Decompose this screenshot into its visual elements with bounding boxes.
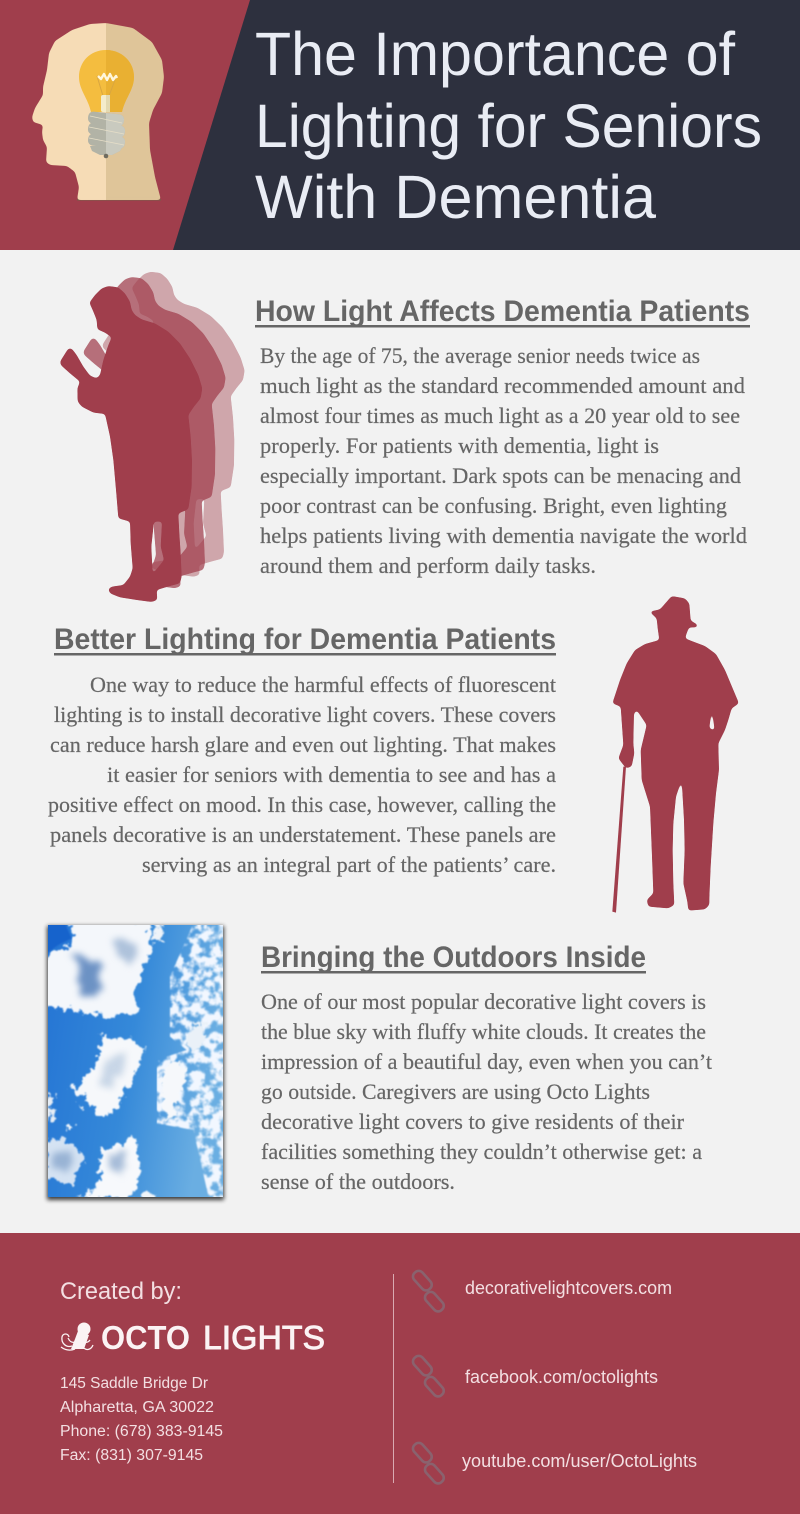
text block: bringing the outdoors: One of our most popular decorative light covers is: [261, 989, 706, 1014]
header banner: [0, 0, 800, 250]
text block: how light affects: around them and perform daily tasks.: [260, 553, 596, 578]
title: With Dementia: [255, 163, 656, 231]
text block: how light affects: [260, 343, 747, 578]
section: how light affects dementia patients: [255, 295, 750, 578]
text block: how light affects: By the age of 75, the average senior needs twice as: [260, 343, 700, 368]
text block: better lighting: it easier for seniors with dementia to see and has a: [107, 762, 556, 787]
text block: bringing the outdoors: [261, 989, 712, 1194]
text block: how light affects: properly. For patients with dementia, light is: [260, 433, 659, 458]
heading: bringing the outdoors: Bringing the Outdoors Inside: [261, 941, 646, 974]
image: blue sky with clouds: [43, 920, 230, 1203]
created by label: Created by:: [60, 1278, 182, 1305]
text block: how light affects: especially important. Dark spots can be menacing and: [260, 463, 741, 488]
text block: better lighting: panels decorative is an understatement. These panels are: [50, 822, 556, 847]
text block: how light affects: much light as the standard recommended amount and: [260, 373, 745, 398]
text block: how light affects: poor contrast can be confusing. Bright, even lighting: [260, 493, 727, 518]
link: youtube: youtube.com/user/OctoLights: [462, 1451, 697, 1471]
text block: how light affects: helps patients living with dementia navigate the world: [260, 523, 747, 548]
address: [60, 1375, 223, 1464]
title: Lighting for Seniors: [255, 92, 762, 160]
illustration: man with hat and cane: [612, 596, 739, 913]
logo: Octo Lights: OCTO: [101, 1319, 190, 1356]
link: facebook: [411, 1354, 658, 1399]
address: Fax: (831) 307-9145: [60, 1447, 203, 1464]
text block: better lighting: [48, 672, 556, 877]
text block: bringing the outdoors: impression of a beautiful day, even when you can’t: [261, 1049, 712, 1074]
illustration: elderly figure with fading echoes: [60, 272, 245, 602]
text block: bringing the outdoors: go outside. Caregivers are using Octo Lights: [261, 1079, 650, 1104]
text block: better lighting: lighting is to install decorative light covers. These covers: [54, 702, 556, 727]
text block: bringing the outdoors: facilities something they couldn’t otherwise get: a: [261, 1139, 702, 1164]
link: youtube: [411, 1441, 697, 1486]
heading: how light affects: How Light Affects Dementia Patients: [255, 295, 750, 328]
text block: better lighting: positive effect on mood. In this case, however, calling the: [48, 792, 556, 817]
text block: how light affects: almost four times as much light as a 20 year old to see: [260, 403, 740, 428]
link: website: [411, 1269, 672, 1314]
logo: Octo Lights: LIGHTS: [203, 1319, 325, 1356]
text block: better lighting: One way to reduce the harmful effects of fluorescent: [90, 672, 556, 697]
address: Phone: (678) 383-9145: [60, 1423, 223, 1440]
text block: better lighting: can reduce harsh glare and even out lighting. That makes: [50, 732, 556, 757]
text block: better lighting: serving as an integral part of the patients’ care.: [142, 852, 556, 877]
logo: Octo Lights: [61, 1319, 325, 1356]
heading: better lighting: Better Lighting for Dementia Patients: [54, 623, 556, 656]
link: website: decorativelightcovers.com: [465, 1278, 672, 1298]
title: The Importance of: [255, 20, 736, 88]
section: better lighting for dementia patients: [48, 623, 556, 877]
text block: bringing the outdoors: decorative light covers to give residents of their: [261, 1109, 685, 1134]
title: [255, 20, 762, 231]
address: Alpharetta, GA 30022: [60, 1399, 214, 1416]
section: bringing the outdoors inside: [261, 941, 712, 1194]
text block: bringing the outdoors: the blue sky with fluffy white clouds. It creates the: [261, 1019, 706, 1044]
text block: bringing the outdoors: sense of the outdoors.: [261, 1169, 455, 1194]
address: 145 Saddle Bridge Dr: [60, 1375, 208, 1392]
footer panel: [0, 1233, 800, 1514]
link: facebook: facebook.com/octolights: [465, 1367, 658, 1387]
icon: head with light bulb: [32, 23, 164, 201]
